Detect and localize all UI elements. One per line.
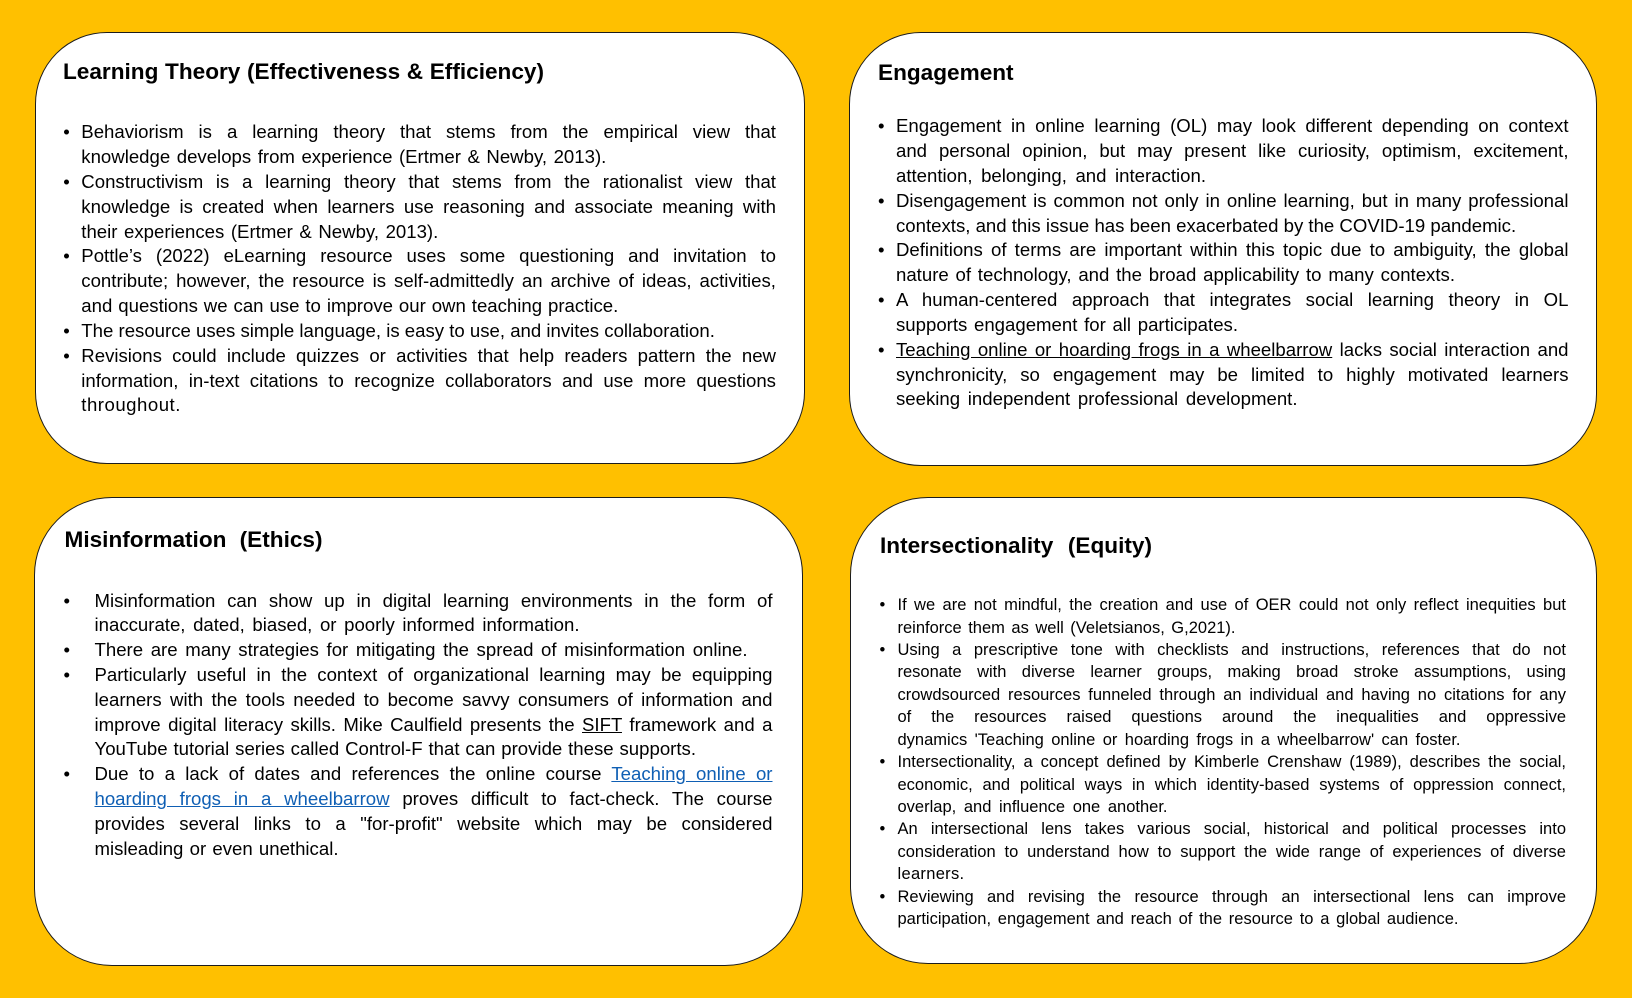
bullet: OER inequities: If we are not mindful, the creation and use of OER could not only reflect inequities but: [898, 596, 1566, 614]
bullet: course fact-check: [64, 763, 772, 859]
bullet: prescriptive tone: [880, 641, 1566, 749]
bullet: course critique: Teaching online or hoarding frogs in a wheelbarrow lacks social interaction and: [896, 339, 1568, 360]
bullet: constructivism: [63, 171, 776, 242]
bullet: engagement definition: Engagement in online learning (OL) may look different depending on context: [896, 115, 1568, 136]
panel: Engagement: •: [878, 115, 885, 136]
panel: Intersectionality: •: [880, 641, 885, 659]
bullet: behaviorism: Behaviorism is a learning theory that stems from the empirical view that: [81, 121, 776, 142]
bullet: constructivism: their experiences (Ertmer & Newby, 2013).: [81, 221, 438, 242]
bullet: course fact-check: provides several links to a "for-profit" website which may be considered: [94, 813, 772, 834]
panel: Learning Theory: •: [63, 171, 70, 192]
panel: Engagement: •: [878, 190, 885, 211]
bullet: behaviorism: knowledge develops from experience (Ertmer & Newby, 2013).: [81, 146, 606, 167]
bullet: Pottle's resource: and questions we can use to improve our own teaching practice.: [81, 295, 618, 316]
bullet: prescriptive tone: resonate with diverse learner groups, making broad stroke assumptions, using: [898, 663, 1566, 681]
bullet: constructivism: Constructivism is a learning theory that stems from the rationalist view that: [81, 171, 776, 192]
bullet: course fact-check: hoarding frogs in a wheelbarrow proves difficult to fact-check. The course: [94, 788, 772, 809]
bullet: organizational learning: improve digital literacy skills. Mike Caulfield presents the SIFT framework and a: [94, 714, 772, 735]
bullet: intersectionality definition: economic, and political ways in which identity-based systems of oppression connect,: [898, 776, 1566, 794]
bullet: organizational learning: [64, 664, 772, 759]
bullet: misinformation forms: Misinformation can show up in digital learning environments in the form of: [94, 590, 772, 610]
panel: Engagement: •: [878, 289, 885, 310]
heading: Intersectionality: Intersectionality (Equity): [880, 532, 1152, 558]
bullet: revisions: Revisions could include quizzes or activities that help readers pattern the new: [81, 345, 776, 366]
panel: Learning Theory: [35, 32, 805, 464]
bullet: misinformation forms: inaccurate, dated, biased, or poorly informed information.: [94, 614, 580, 635]
bullet: Pottle's resource: Pottle’s (2022) eLearning resource uses some questioning and invitation to: [81, 245, 776, 266]
bullet: revisions: [63, 345, 776, 415]
bullet: Pottle's resource: [63, 245, 776, 316]
bullet: organizational learning: learners with the tools needed to become savvy consumers of information and: [94, 689, 772, 710]
bullet: human-centered approach: [878, 289, 1568, 335]
panel: Misinformation: •: [64, 590, 70, 610]
panel: Misinformation: [34, 496, 803, 966]
bullet: disengagement: [878, 190, 1568, 236]
bullet: intersectional lens: learners.: [898, 865, 964, 883]
panel: Engagement: •: [878, 339, 885, 360]
panel: Misinformation: •: [64, 763, 70, 784]
text block: engagement bullets: [878, 115, 1568, 409]
panel: Intersectionality: •: [880, 596, 885, 614]
bullet: reviewing and revising: Reviewing and revising the resource through an intersectional lens can improve: [898, 888, 1566, 906]
bullet: engagement definition: [878, 115, 1568, 186]
bullet: organizational learning: YouTube tutorial series called Control-F that can provide these supports.: [94, 738, 696, 759]
bullet: engagement definition: and personal opinion, but may present like curiosity, optimism, excitement,: [896, 140, 1568, 161]
bullet: prescriptive tone: of the resources raised questions around the inequalities and oppressive: [898, 708, 1566, 726]
panel: Engagement: •: [878, 239, 885, 260]
panel: Learning Theory: •: [63, 121, 70, 142]
bullet: intersectional lens: An intersectional lens takes various social, historical and political processes into: [898, 820, 1566, 838]
text block: misinformation bullets: [64, 590, 773, 859]
heading: Misinformation: Misinformation (Ethics): [64, 526, 322, 552]
text block: intersectionality bullets: [880, 596, 1566, 928]
bullet: revisions: information, in-text citations to recognize collaborators and use more questions: [81, 370, 776, 391]
bullet: course critique: seeking independent professional development.: [896, 388, 1298, 409]
bullet: intersectionality definition: overlap, and influence one another.: [898, 798, 1168, 816]
bullet: prescriptive tone: crowdsourced resources funneled through an individual and having no citations for any: [898, 686, 1566, 704]
bullet: simple language: The resource uses simple language, is easy to use, and invites collaboration.: [81, 320, 715, 341]
bullet: intersectional lens: [880, 820, 1566, 883]
panel: Misinformation: •: [64, 664, 70, 685]
panel: Engagement: [848, 32, 1596, 466]
bullet: course critique: [878, 339, 1568, 409]
heading: Learning Theory: Learning Theory (Effectiveness & Efficiency): [63, 59, 544, 84]
panel: Intersectionality: •: [880, 888, 885, 906]
bullet: constructivism: knowledge is created when learners use reasoning and associate meaning with: [81, 196, 776, 217]
bullet: definitions: [878, 239, 1568, 285]
panel: Intersectionality: [850, 496, 1597, 964]
heading: Engagement: Engagement: [878, 60, 1014, 85]
bullet: revisions: throughout.: [81, 394, 181, 415]
bullet: definitions: nature of technology, and the broad applicability to many contexts.: [896, 264, 1455, 285]
bullet: human-centered approach: A human-centered approach that integrates social learning theory in OL: [896, 289, 1568, 310]
bullet: course fact-check: Due to a lack of dates and references the online course Teaching online or: [94, 763, 772, 784]
text block: learning theory bullets: [63, 121, 776, 415]
panel: Misinformation: •: [64, 639, 70, 660]
bullet: behaviorism: [63, 121, 776, 167]
bullet: course fact-check: misleading or even unethical.: [94, 838, 338, 859]
bullet: intersectionality definition: [880, 753, 1566, 816]
bullet: prescriptive tone: Using a prescriptive tone with checklists and instructions, references that do not: [898, 641, 1566, 659]
panel: Learning Theory: •: [63, 320, 70, 341]
panel: Intersectionality: •: [880, 820, 885, 838]
bullet: engagement definition: attention, belonging, and interaction.: [896, 165, 1206, 186]
bullet: organizational learning: Particularly useful in the context of organizational learning may be equipping: [94, 664, 772, 685]
bullet: course critique: synchronicity, so engagement may be limited to highly motivated learners: [896, 364, 1568, 385]
bullet: disengagement: Disengagement is common not only in online learning, but in many professional: [896, 190, 1568, 211]
bullet: prescriptive tone: dynamics 'Teaching online or hoarding frogs in a wheelbarrow' can foster.: [898, 731, 1460, 749]
panel: Learning Theory: •: [63, 245, 70, 266]
bullet: intersectionality definition: Intersectionality, a concept defined by Kimberle Crenshaw (1989), describes the social,: [898, 753, 1566, 771]
bullet: strategies: There are many strategies for mitigating the spread of misinformation online.: [94, 639, 748, 660]
bullet: human-centered approach: supports engagement for all participates.: [896, 314, 1238, 335]
panel: Learning Theory: •: [63, 345, 70, 366]
bullet: reviewing and revising: [880, 888, 1566, 928]
bullet: misinformation forms: [64, 590, 773, 635]
bullet: definitions: Definitions of terms are important within this topic due to ambiguity, the global: [896, 239, 1568, 260]
bullet: Pottle's resource: contribute; however, the resource is self-admittedly an archive of ideas, activities,: [81, 270, 776, 291]
bullet: intersectional lens: consideration to understand how to support the wide range of experiences of diverse: [898, 843, 1566, 861]
bullet: reviewing and revising: participation, engagement and reach of the resource to a global audience.: [898, 910, 1458, 928]
bullet: OER inequities: reinforce them as well (Veletsianos, G,2021).: [898, 619, 1236, 637]
panel: Intersectionality: •: [880, 753, 885, 771]
bullet: disengagement: contexts, and this issue has been exacerbated by the COVID-19 pandemic.: [896, 215, 1516, 236]
bullet: OER inequities: [880, 596, 1566, 637]
